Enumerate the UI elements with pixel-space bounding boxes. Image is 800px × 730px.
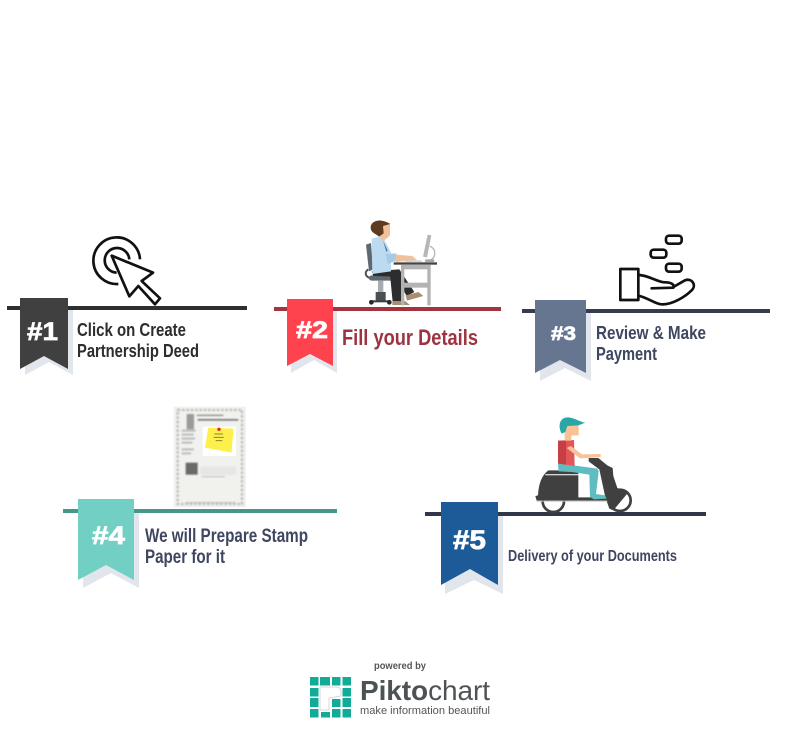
ribbon 2 shadow (291, 311, 337, 373)
divider line 3 (522, 309, 770, 313)
icon: hand with coins (620, 236, 694, 304)
piktochart wordmark: Piktochart (360, 675, 490, 706)
ribbon 2 (287, 299, 333, 366)
step 3 label: Review & Make (596, 323, 706, 343)
step number 2: #2 (296, 317, 328, 344)
icon: delivery rider on scooter (535, 417, 631, 512)
step number 3: #3 (551, 324, 576, 345)
step 1: click on create partnership deed (7, 237, 247, 375)
divider line 1 (7, 306, 247, 310)
step 2 label: Fill your Details (342, 325, 478, 350)
step number 5: #5 (453, 525, 486, 555)
logo P outline (320, 687, 341, 710)
divider line 2 (274, 307, 501, 311)
step 5 label: Delivery of your Documents (508, 548, 677, 565)
divider line 4 (63, 509, 337, 513)
icon: cursor click (93, 237, 160, 304)
ribbon 4 (78, 499, 134, 580)
divider line 5 (425, 512, 706, 516)
ribbon 3 shadow (540, 313, 591, 381)
step 4 label: Paper for it (145, 547, 226, 568)
step 3 label: Payment (596, 344, 657, 364)
logo mark (310, 677, 351, 718)
step 1 label: Partnership Deed (77, 341, 199, 361)
step 1 label: Click on Create (77, 320, 186, 340)
icon: person at desk (366, 221, 437, 305)
piktochart footer logo (310, 661, 490, 718)
step number 1: #1 (27, 318, 58, 346)
step 4: prepare stamp paper (63, 407, 337, 588)
powered by text: powered by (374, 661, 426, 672)
step number 4: #4 (92, 522, 125, 550)
step 4 label: We will Prepare Stamp (145, 526, 308, 547)
tagline: make information beautiful (360, 705, 490, 717)
ribbon 5 (441, 502, 498, 585)
step 5: delivery of documents (425, 417, 706, 594)
ribbon 1 (20, 298, 68, 369)
step 2: fill your details (274, 221, 501, 373)
ribbon 5 shadow (445, 516, 503, 594)
ribbon 1 shadow (25, 310, 73, 375)
ribbon 3 (535, 300, 586, 373)
ribbon 4 shadow (83, 513, 139, 588)
step 3: review and make payment (522, 236, 770, 381)
icon: stamp paper document (174, 407, 246, 507)
